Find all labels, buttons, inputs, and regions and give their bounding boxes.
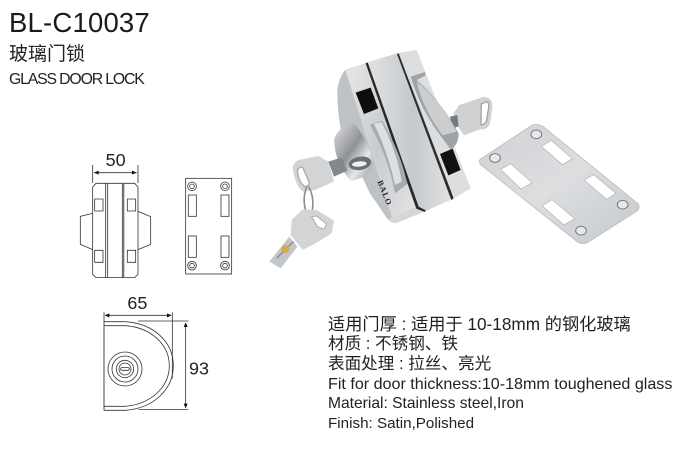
left groove [366,62,426,212]
title: English product name: GLASS DOOR LOCK [9,71,144,88]
drawing: front view with width dimension 50 [80,150,151,278]
spec: door thickness Chinese: 适用门厚 : 适用于 10-18mm 的钢化玻璃 [328,314,631,334]
drawing: mounting plate outline [186,178,232,274]
title: model number: BL-C10037 [9,7,150,38]
dimension: 65 width: 65 [127,293,147,313]
drawing: side view with dimensions 65 and 93 [104,293,209,410]
spec: material Chinese: 材质 : 不锈钢、铁 [328,334,458,353]
title: Chinese product name: 玻璃门锁 [9,44,85,65]
hanging key [269,209,334,268]
center plate [368,53,451,211]
brand mark: BALO [375,179,394,207]
dimension: 50 width: 50 [106,150,126,170]
spec: door thickness English: Fit for door thickness:10-18mm toughened glass [328,375,672,393]
lock cylinder [328,124,373,181]
left side curve [337,70,392,220]
photo: glass door lock with keys [269,50,492,268]
front handle recess [370,121,407,193]
key ring [304,187,313,217]
spec: material English: Material: Stainless steel,Iron [328,395,524,412]
rear key [450,97,492,135]
lock body [337,50,471,223]
window: lower slot [440,149,461,175]
right strip [399,50,471,198]
front key [293,156,334,192]
window: upper slot [356,88,378,114]
right groove [397,53,454,200]
spec: finish Chinese: 表面处理 : 拉丝、亮光 [328,354,491,373]
spec: finish English: Finish: Satin,Polished [328,415,474,432]
left strip [346,64,416,218]
photo: mounting plate [479,124,639,244]
dimension: 93 height: 93 [189,358,209,378]
rear handle recess [411,72,459,149]
